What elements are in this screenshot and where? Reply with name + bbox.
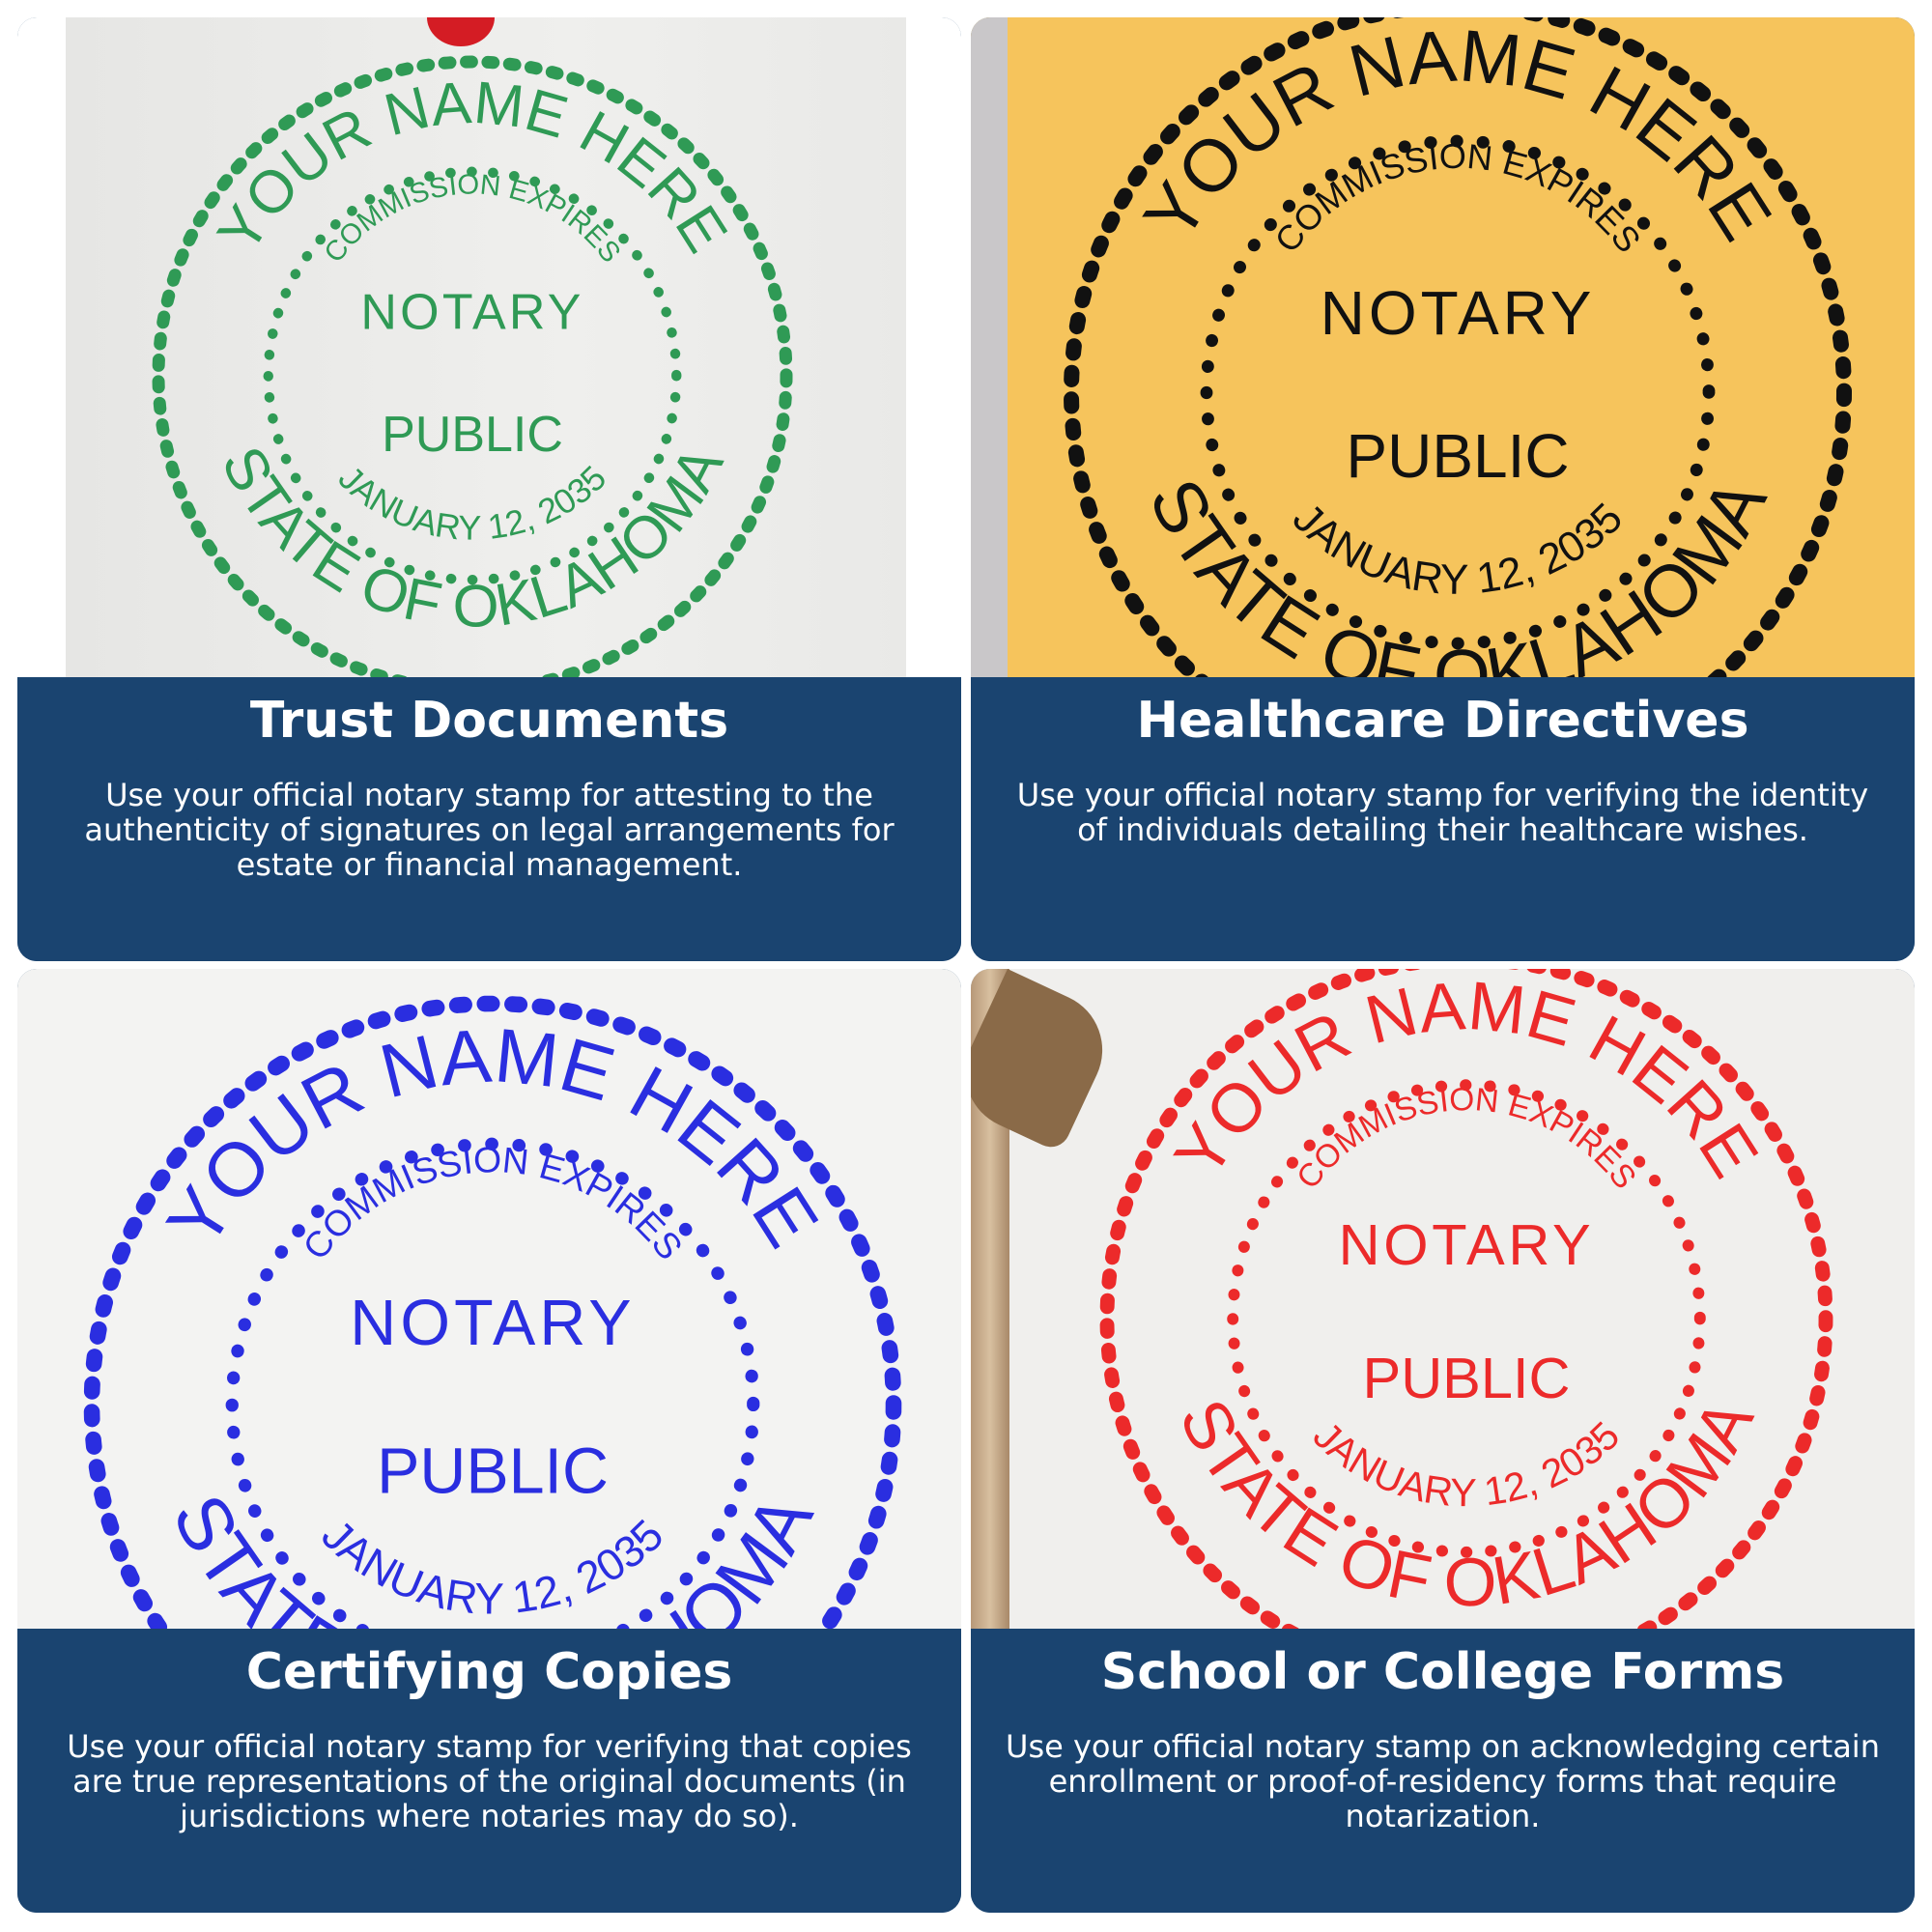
image: red stamp with wooden stick: NOTARY bbox=[1339, 1212, 1594, 1277]
image: blue stamp on white paper: YOUR NAME HERE bbox=[165, 1029, 819, 1250]
image: black stamp on yellow paper bbox=[971, 17, 1915, 677]
image: red stamp with wooden stick bbox=[971, 969, 1915, 1629]
caption: healthcare directives: Use your official notary stamp for verifying the identity of individuals detailing their healthcare wishes. bbox=[1017, 777, 1868, 848]
caption: trust documents: Trust Documents bbox=[250, 692, 728, 750]
image: black stamp on yellow paper: PUBLIC bbox=[1346, 421, 1570, 491]
image: blue stamp on white paper: NOTARY bbox=[350, 1288, 636, 1359]
image: green stamp on paper: JANUARY 12, 2035 bbox=[339, 466, 605, 540]
image: red stamp with wooden stick: JANUARY 12, 2035 bbox=[1314, 1421, 1617, 1507]
image: green stamp on paper: PUBLIC bbox=[382, 407, 563, 463]
caption: school or college forms bbox=[971, 1629, 1915, 1913]
caption: trust documents bbox=[17, 677, 961, 961]
image: blue stamp on white paper: PUBLIC bbox=[377, 1435, 609, 1507]
image: blue stamp on white paper: COMMISSION EXPIRES bbox=[306, 1148, 680, 1258]
caption: healthcare directives: Healthcare Directives bbox=[1136, 692, 1749, 750]
caption: certifying copies bbox=[17, 1629, 961, 1913]
image: red stamp with wooden stick: YOUR NAME HERE bbox=[1173, 981, 1758, 1180]
image: green stamp on paper: STATE OF OKLAHOMA bbox=[226, 449, 724, 627]
panel: healthcare directives bbox=[971, 17, 1915, 961]
panel: certifying copies bbox=[17, 969, 961, 1913]
image: green stamp on paper bbox=[17, 17, 961, 677]
image: red stamp with wooden stick: STATE OF OKLAHOMA bbox=[1184, 1403, 1754, 1606]
caption: school or college forms: School or College Forms bbox=[1101, 1643, 1784, 1701]
caption: healthcare directives bbox=[971, 677, 1915, 961]
image: black stamp on yellow paper: NOTARY bbox=[1321, 278, 1595, 348]
image: red stamp with wooden stick: COMMISSION EXPIRES bbox=[1299, 1088, 1634, 1188]
image: red stamp with wooden stick: PUBLIC bbox=[1362, 1346, 1571, 1410]
image: green stamp on paper: COMMISSION EXPIRES bbox=[327, 174, 620, 261]
image: green stamp on paper: NOTARY bbox=[360, 284, 584, 340]
caption: certifying copies: Use your official notary stamp for verifying that copies are true representations of the original documents (in jurisdictions where notaries may do so). bbox=[67, 1728, 912, 1834]
caption: trust documents: Use your official notary stamp for attesting to the authenticity of signatures on legal arrangements for estate or financial management. bbox=[84, 777, 895, 883]
image: blue stamp on white paper: JANUARY 12, 2035 bbox=[323, 1519, 661, 1613]
image: blue stamp on white paper bbox=[17, 969, 961, 1629]
image: black stamp on yellow paper: JANUARY 12, 2035 bbox=[1294, 502, 1621, 594]
image: black stamp on yellow paper: YOUR NAME HERE bbox=[1142, 31, 1772, 243]
caption: school or college forms: Use your official notary stamp on acknowledging certain enrollment or proof-of-residency forms that require notarization. bbox=[1006, 1728, 1880, 1834]
image: black stamp on yellow paper: COMMISSION EXPIRES bbox=[1278, 144, 1638, 251]
caption: certifying copies: Certifying Copies bbox=[246, 1643, 732, 1701]
image: green stamp on paper: YOUR NAME HERE bbox=[216, 81, 728, 255]
panel: trust documents bbox=[17, 17, 961, 961]
panel: school or college forms bbox=[971, 969, 1915, 1913]
